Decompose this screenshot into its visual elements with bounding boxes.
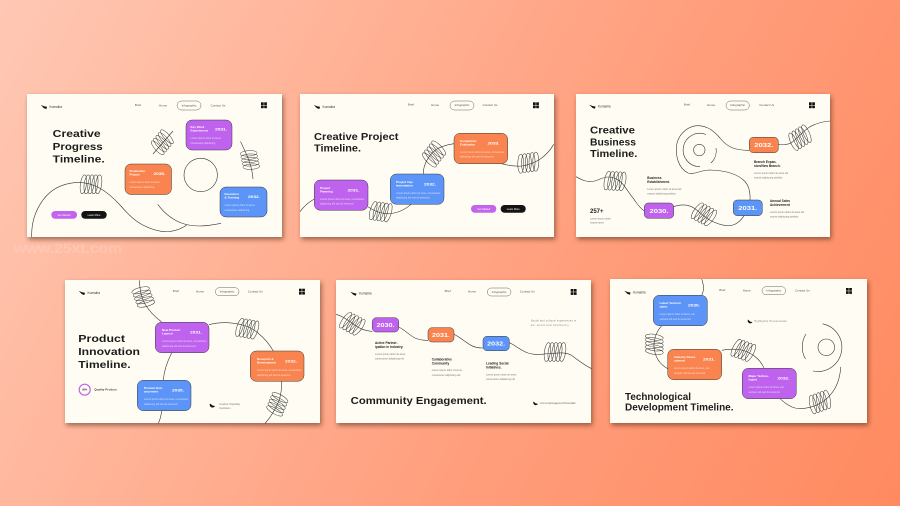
buttons: Learn More [88,214,101,217]
note with icon: Creative Originality [219,403,241,406]
card: 2030: Lorem ipsum dolor sit amet [130,181,160,184]
spring coil [79,174,103,194]
text: active partner: Active Partner- [375,341,398,345]
card: 2031: Planning [320,190,333,194]
card: 2030: adipiscing elit sed do eiusmod [144,403,178,406]
note with icon: Highlights Presentation [754,320,787,323]
watermark: www.25xt.com [13,240,122,256]
logo: Kumalira [88,291,100,295]
text: collaborative community: Community [432,362,449,366]
navigation: Contact Us [483,103,498,107]
card: 2032: adipiscing elit sed do eiusmod [396,196,430,200]
navigation: Brief [408,102,414,106]
navigation: Home [431,103,439,107]
text: business establishment: Establishment. [647,180,670,184]
card: 2032: sectetur elit sed do eiusmod [748,391,780,394]
note with icon: Community Engagement Presentation [540,402,577,405]
card: 2032: Development [257,360,276,364]
card: 2032 [742,368,796,399]
text: active partner [375,341,406,360]
spring coil [515,151,541,174]
card: 2032 [250,351,304,381]
card: 2030: 2030. [172,388,184,392]
spring coil [130,283,156,311]
year tag 2030 [644,203,674,218]
circle [184,158,217,192]
stat: 257+: Lorem ipsum dolor [590,218,611,220]
text: leading social [486,362,517,381]
card: 2031: Project [320,186,330,190]
title: Timeline. [590,148,637,160]
text: active partner: consectetur adipiscing elit. [375,358,405,360]
navigation [135,101,226,110]
spring coil [785,123,815,152]
title [590,124,637,160]
year tag 2031 [428,328,454,342]
navigation: Home [743,288,751,292]
card: 2033: Completion [460,139,477,143]
curves [300,144,554,214]
card: 2032: Lorem ipsum dolor sit amet, consectetur [396,192,441,195]
quality ring: 90% [82,389,88,392]
card: 2031: sectetur elit sed do eiusmod [674,372,706,375]
text: branch expansion: Lorem ipsum dolor sit amet elit [754,172,788,175]
year tag 2031 [733,200,762,216]
navigation [719,287,810,295]
text: annual sales: Lorem ipsum dolor sit amet elit [770,211,804,214]
card: 2031: 2031. [190,330,202,334]
title: Community Engagement. [351,395,487,407]
card: 2031: 2031. [215,126,227,132]
navigation: Home [159,104,167,108]
spring coil [543,342,567,362]
title [314,131,399,154]
spring coil [264,390,290,418]
menu icon [571,289,577,295]
year tag 2030: 2030. [376,323,395,329]
card: 2032: Lorem ipsum dolor sit amet, con [748,386,785,389]
logo [41,105,62,109]
text: annual sales [770,199,804,218]
menu icon [299,289,305,295]
text: collaborative community [432,358,463,377]
text: branch expansion: Branch Expan- [754,160,776,164]
year tag 2030 [372,318,399,332]
buttons [471,205,526,213]
navigation: Contact Us [795,288,810,292]
navigation: Infographic [766,289,782,293]
year tag 2032: 2032. [487,341,506,347]
card: 2033: adipiscing elit sed do eiusmod [460,156,494,158]
text: branch expansion: mauris adipiscing porttitor [754,176,783,180]
text: active partner: ipation in Industry. [375,345,403,349]
navigation: Infographic [730,103,746,107]
title: Timeline. [78,359,131,371]
panel: product innovation timeline [65,280,320,424]
text: active partner: Lorem ipsum dolor sit amet, [375,353,406,356]
buttons: Learn More [507,208,520,211]
spring coil with stem [148,128,177,157]
card: 2032: Research & [257,357,274,361]
title: Innovation [78,346,140,358]
curves [576,121,830,226]
text: branch expansion [754,160,788,180]
card: 2031 [314,180,368,210]
card: 2031: Lorem ipsum dolor sit amet [190,137,221,140]
stat: 257+ [590,209,611,224]
buttons: Get Started [58,214,71,217]
text: collaborative community: consectetur adipiscing elit. [432,374,461,377]
navigation [173,288,263,296]
card: 2032: consectetur adipiscing [224,209,250,212]
text: top note [531,320,577,327]
navigation: Brief [684,102,690,106]
card: 2031 [186,120,232,150]
card: 2032: Lorem ipsum dolor sit amet, consectetur [257,369,302,372]
card: 2030: consectetur adipiscing [130,186,155,189]
title: Creative Project [314,131,399,143]
card: 2033: 2033. [488,140,500,146]
card: 2031: 2031. [348,188,360,192]
title [78,333,140,371]
spring coil [645,333,664,356]
card: 2031: consectetur adipiscing [190,142,216,145]
card: 2030: ancement [144,390,158,394]
title: Timeline. [314,142,361,154]
panel: creative business timeline [576,94,830,237]
logo [589,105,611,109]
note with icon: Inspiration [219,407,231,410]
card: 2031: adipiscing elit sed do eiusmod [162,345,196,348]
card: 2032: 2032. [424,182,436,186]
title: Progress [53,141,103,153]
curves [139,280,282,424]
logo [624,291,646,295]
card: 2031 [155,322,209,353]
text: collaborative community: Lorem ipsum dolor sit amet, [432,369,463,372]
text: collaborative community: Collaborative [432,358,452,362]
logo [79,291,100,295]
card: 2031: opment [674,358,685,362]
title: Creative [590,124,635,136]
card: 2032: Lorem ipsum dolor sit amet [224,204,255,207]
card: 2033 [454,133,508,164]
navigation: Home [468,290,476,294]
concentric circle [802,324,842,371]
spring coil [729,337,758,364]
navigation: Brief [135,103,141,107]
card: 2032: lementation [396,184,413,188]
card: 2030: Project [130,172,140,176]
card: 2031: Lorem ipsum dolor sit amet, con [674,367,710,370]
navigation: Home [707,103,715,107]
spring coil [603,171,627,191]
card: 2032: adipiscing elit sed do eiusmod [257,374,291,377]
spring coil with stem [239,142,261,179]
curves [336,314,592,369]
note with icon [533,402,577,405]
panel: technological development timeline [610,279,867,423]
card: 2033: Evaluation [460,142,475,146]
text: top note: Social and cultural experiences in [531,320,577,322]
card: 2031: Key Work [190,125,205,129]
navigation: Infographic [455,103,470,107]
card: 2031: adipiscing elit sed do eiusmod [320,202,354,206]
navigation: Brief [719,288,726,292]
text: leading social: Initiatives. [486,366,502,370]
card: 2032: 2032. [248,194,260,199]
navigation: Brief [445,289,451,293]
panel: creative project timeline [300,94,554,237]
text: leading social: Lorem ipsum dolor sit amet, [486,374,517,376]
card: 2032: Project Imp- [396,180,413,184]
menu icon [533,102,539,108]
quality ring [79,384,117,395]
quality ring: Quality Product [94,388,117,392]
card: 2030: Latest Technol- [660,301,681,305]
card: 2031: Lorem ipsum dolor sit amet, consectetur [162,340,207,343]
card: 2032: 2032. [285,358,297,364]
card: 2031: 2031. [703,356,715,362]
menu icon [846,288,852,294]
title: Product [78,333,126,345]
card: 2032: Execution [224,192,239,196]
card: 2030: ogies [660,304,668,308]
card: 2031: Lorem ipsum dolor sit amet, consectetur [320,198,365,201]
card: 2030 [653,295,707,326]
navigation [408,101,498,110]
year tag 2030: 2030. [650,209,669,215]
spring coil [368,200,394,223]
title: Business [590,136,636,148]
card: 2030: Product Enh- [144,386,163,390]
title: Development Timeline. [625,402,734,414]
card: 2030 [125,164,172,194]
title: Technological [625,391,691,403]
year tag 2032: 2032. [754,143,774,149]
stat: 257+: 257+ [590,209,604,215]
year tag 2032 [749,137,778,153]
card: 2031: Experiences [190,128,209,132]
card: 2031: New Product [162,328,180,332]
navigation [684,101,775,110]
text: branch expansion: sion/New Branch. [754,164,781,168]
card: 2030: sectetur elit sed do eiusmod [660,318,691,321]
year tag 2031: 2031. [738,206,758,212]
title [625,391,734,414]
card: 2031 [668,349,722,380]
title: Timeline. [53,154,105,166]
panel: creative progress timeline [27,94,282,237]
menu icon [261,102,267,108]
logo: Kumalira [633,291,646,295]
card: 2032: Major Techno- [748,374,769,378]
card: 2032 [390,174,444,204]
navigation: Contact Us [211,104,226,108]
card: 2030: Lorem ipsum dolor sit amet, con [660,313,696,316]
card: 2030: Production [130,169,145,173]
title [53,128,105,166]
card: 2032: 2032. [778,376,790,380]
navigation: Infographic [182,104,197,108]
navigation [445,288,535,296]
logo [350,292,372,296]
title: Creative [53,128,101,140]
note with icon [748,320,787,323]
card: 2032 [220,187,267,217]
logo [314,105,335,109]
text: leading social: consectetur adipiscing elit. [486,378,516,381]
card: 2030: Lorem ipsum dolor sit amet, consectetur [144,398,189,401]
note with icon [210,403,241,410]
text: business establishment: Business [647,176,662,180]
navigation: Contact Us [759,103,775,107]
curves [654,279,841,409]
text: annual sales: mauris adipiscing porttitor [770,216,799,218]
navigation: Infographic [220,290,235,294]
card: 2031: Industry Devel- [674,355,696,359]
logo: Kumalira [359,292,372,296]
logo: Kumalira [322,105,335,109]
text: business establishment: Lorem ipsum dolor sit amet elit [647,188,682,191]
text: top note: our world and community [531,324,569,327]
card: 2031: Launch [162,332,173,336]
menu icon [809,102,815,108]
stat: 257+: mauris amet [590,222,604,224]
card: 2032: logies [748,378,758,382]
buttons: Get Started [477,208,491,211]
buttons [51,211,107,219]
year tag 2031: 2031. [432,333,451,339]
navigation: Home [196,290,204,294]
text: business establishment [647,176,682,196]
card: 2033: Lorem ipsum dolor sit amet, consectetur [460,151,505,154]
text: leading social: Leading Social [486,362,509,366]
navigation: Contact Us [248,290,263,294]
text: annual sales: Achievement [770,203,791,207]
spring coil [419,139,449,169]
navigation: Brief [173,289,179,293]
card: 2030 [137,380,191,411]
card: 2030: 2030. [688,302,700,308]
year tag 2032 [483,336,509,351]
logo: Kumalira [598,105,611,109]
spring coil [689,200,719,229]
concentric circle [683,133,716,167]
curves [32,182,221,237]
panel: community engagement [336,280,592,423]
navigation: Contact Us [520,290,535,294]
text: annual sales: Annual Sales [770,199,790,203]
navigation: Infographic [492,290,507,294]
logo: Kumalira [50,105,62,109]
spring coil [234,317,261,340]
spring coil [805,389,835,415]
text: business establishment: mauris adipiscing porttitor [647,192,676,196]
card: 2030: 2030. [154,171,166,176]
card: 2032: & Training [224,196,239,200]
spring coil [337,309,367,338]
